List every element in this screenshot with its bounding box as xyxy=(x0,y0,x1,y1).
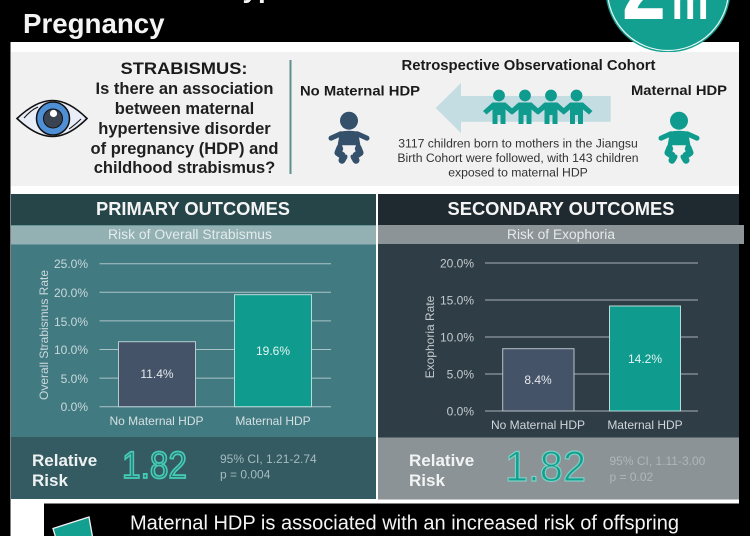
question text: hypertensive disorder xyxy=(98,120,271,138)
question text: Is there an association xyxy=(96,80,273,98)
icon: baby, no maternal HDP xyxy=(331,112,367,160)
title: Pregnancy xyxy=(23,8,165,39)
relative risk: primary: 95% CI, 1.21-2.74 xyxy=(220,452,317,466)
bar chart: overall strabismus rate: Overall Strabismus Rate xyxy=(37,270,51,400)
bar chart: exophoria rate: Exophoria Rate xyxy=(423,295,437,378)
conclusion text: Maternal HDP is associated with an increased risk of offspring xyxy=(130,512,679,534)
panel: secondary outcomes xyxy=(378,194,744,500)
label: maternal HDP: Maternal HDP xyxy=(631,82,727,98)
title xyxy=(23,0,568,39)
cohort description: 3117 children born to mothers in the Jiangsu xyxy=(398,137,638,151)
panel: study question and design xyxy=(11,52,739,186)
panel: primary outcomes xyxy=(11,194,376,499)
bar chart: overall strabismus rate: No Maternal HDP xyxy=(109,414,204,428)
bar chart: overall strabismus rate: 11.4% xyxy=(140,367,174,381)
relative risk: primary: p = 0.004 xyxy=(220,468,271,482)
relative risk: secondary: p = 0.02 xyxy=(610,470,654,484)
question text: of pregnancy (HDP) and xyxy=(91,140,278,158)
bar chart: exophoria rate: 20.0% xyxy=(440,256,474,270)
bar chart: exophoria rate: 5.0% xyxy=(447,368,474,382)
relative risk: secondary xyxy=(378,438,739,500)
icon: baby, maternal HDP xyxy=(661,112,697,160)
question text: between maternal xyxy=(115,100,254,118)
cohort description: exposed to maternal HDP xyxy=(448,166,588,180)
bar chart: overall strabismus rate: 19.6% xyxy=(256,344,290,358)
question heading: STRABISMUS: xyxy=(120,59,248,78)
subheading: risk of overall strabismus: Risk of Overall Strabismus xyxy=(108,227,272,242)
bar chart: overall strabismus rate: 25.0% xyxy=(54,257,88,271)
relative risk: primary: Risk xyxy=(32,471,68,490)
subheading: risk of exophoria: Risk of Exophoria xyxy=(507,227,615,242)
bar chart: overall strabismus rate: 5.0% xyxy=(61,372,88,386)
logo: 2m badge xyxy=(606,0,730,52)
relative risk: secondary: Relative xyxy=(409,451,474,470)
icon: row of children xyxy=(483,90,592,124)
question text xyxy=(91,80,278,177)
bar chart: exophoria rate: 10.0% xyxy=(440,330,474,344)
relative risk: primary: Relative xyxy=(32,451,97,470)
bar chart: exophoria rate: 15.0% xyxy=(440,294,474,308)
heading: secondary outcomes: SECONDARY OUTCOMES xyxy=(448,199,674,219)
relative risk: secondary: Risk xyxy=(409,471,445,490)
bar chart: overall strabismus rate: Maternal HDP xyxy=(235,414,311,428)
relative risk: primary xyxy=(11,437,376,499)
icon: eye xyxy=(17,100,87,136)
bar chart: exophoria rate: Maternal HDP xyxy=(607,418,683,432)
heading: primary outcomes: PRIMARY OUTCOMES xyxy=(96,199,290,219)
arrow xyxy=(436,83,611,133)
cohort description: Birth Cohort were followed, with 143 children xyxy=(397,151,639,165)
bar chart: overall strabismus rate: 10.0% xyxy=(54,343,88,357)
bar chart: exophoria rate: 8.4% xyxy=(524,373,552,387)
bar chart: overall strabismus rate: 0.0% xyxy=(61,400,88,414)
cohort heading: Retrospective Observational Cohort xyxy=(402,58,656,74)
icon: teal note xyxy=(53,517,94,536)
label: no maternal HDP: No Maternal HDP xyxy=(300,82,420,98)
bar chart: overall strabismus rate: 15.0% xyxy=(54,315,88,329)
question text: childhood strabismus? xyxy=(94,159,275,177)
bar chart: exophoria rate xyxy=(423,256,698,432)
bar chart: exophoria rate: 0.0% xyxy=(447,404,474,418)
bar chart: overall strabismus rate xyxy=(37,257,331,428)
relative risk: secondary: 95% CI, 1.11-3.00 xyxy=(610,454,706,468)
relative risk: secondary: 1.82 xyxy=(505,443,586,491)
bar chart: overall strabismus rate: 20.0% xyxy=(54,286,88,300)
bar chart: exophoria rate: No Maternal HDP xyxy=(491,418,585,432)
cohort description xyxy=(397,137,639,180)
conclusion banner xyxy=(44,504,750,536)
relative risk: primary: 1.82 xyxy=(122,445,187,487)
bar chart: exophoria rate: 14.2% xyxy=(628,352,662,366)
